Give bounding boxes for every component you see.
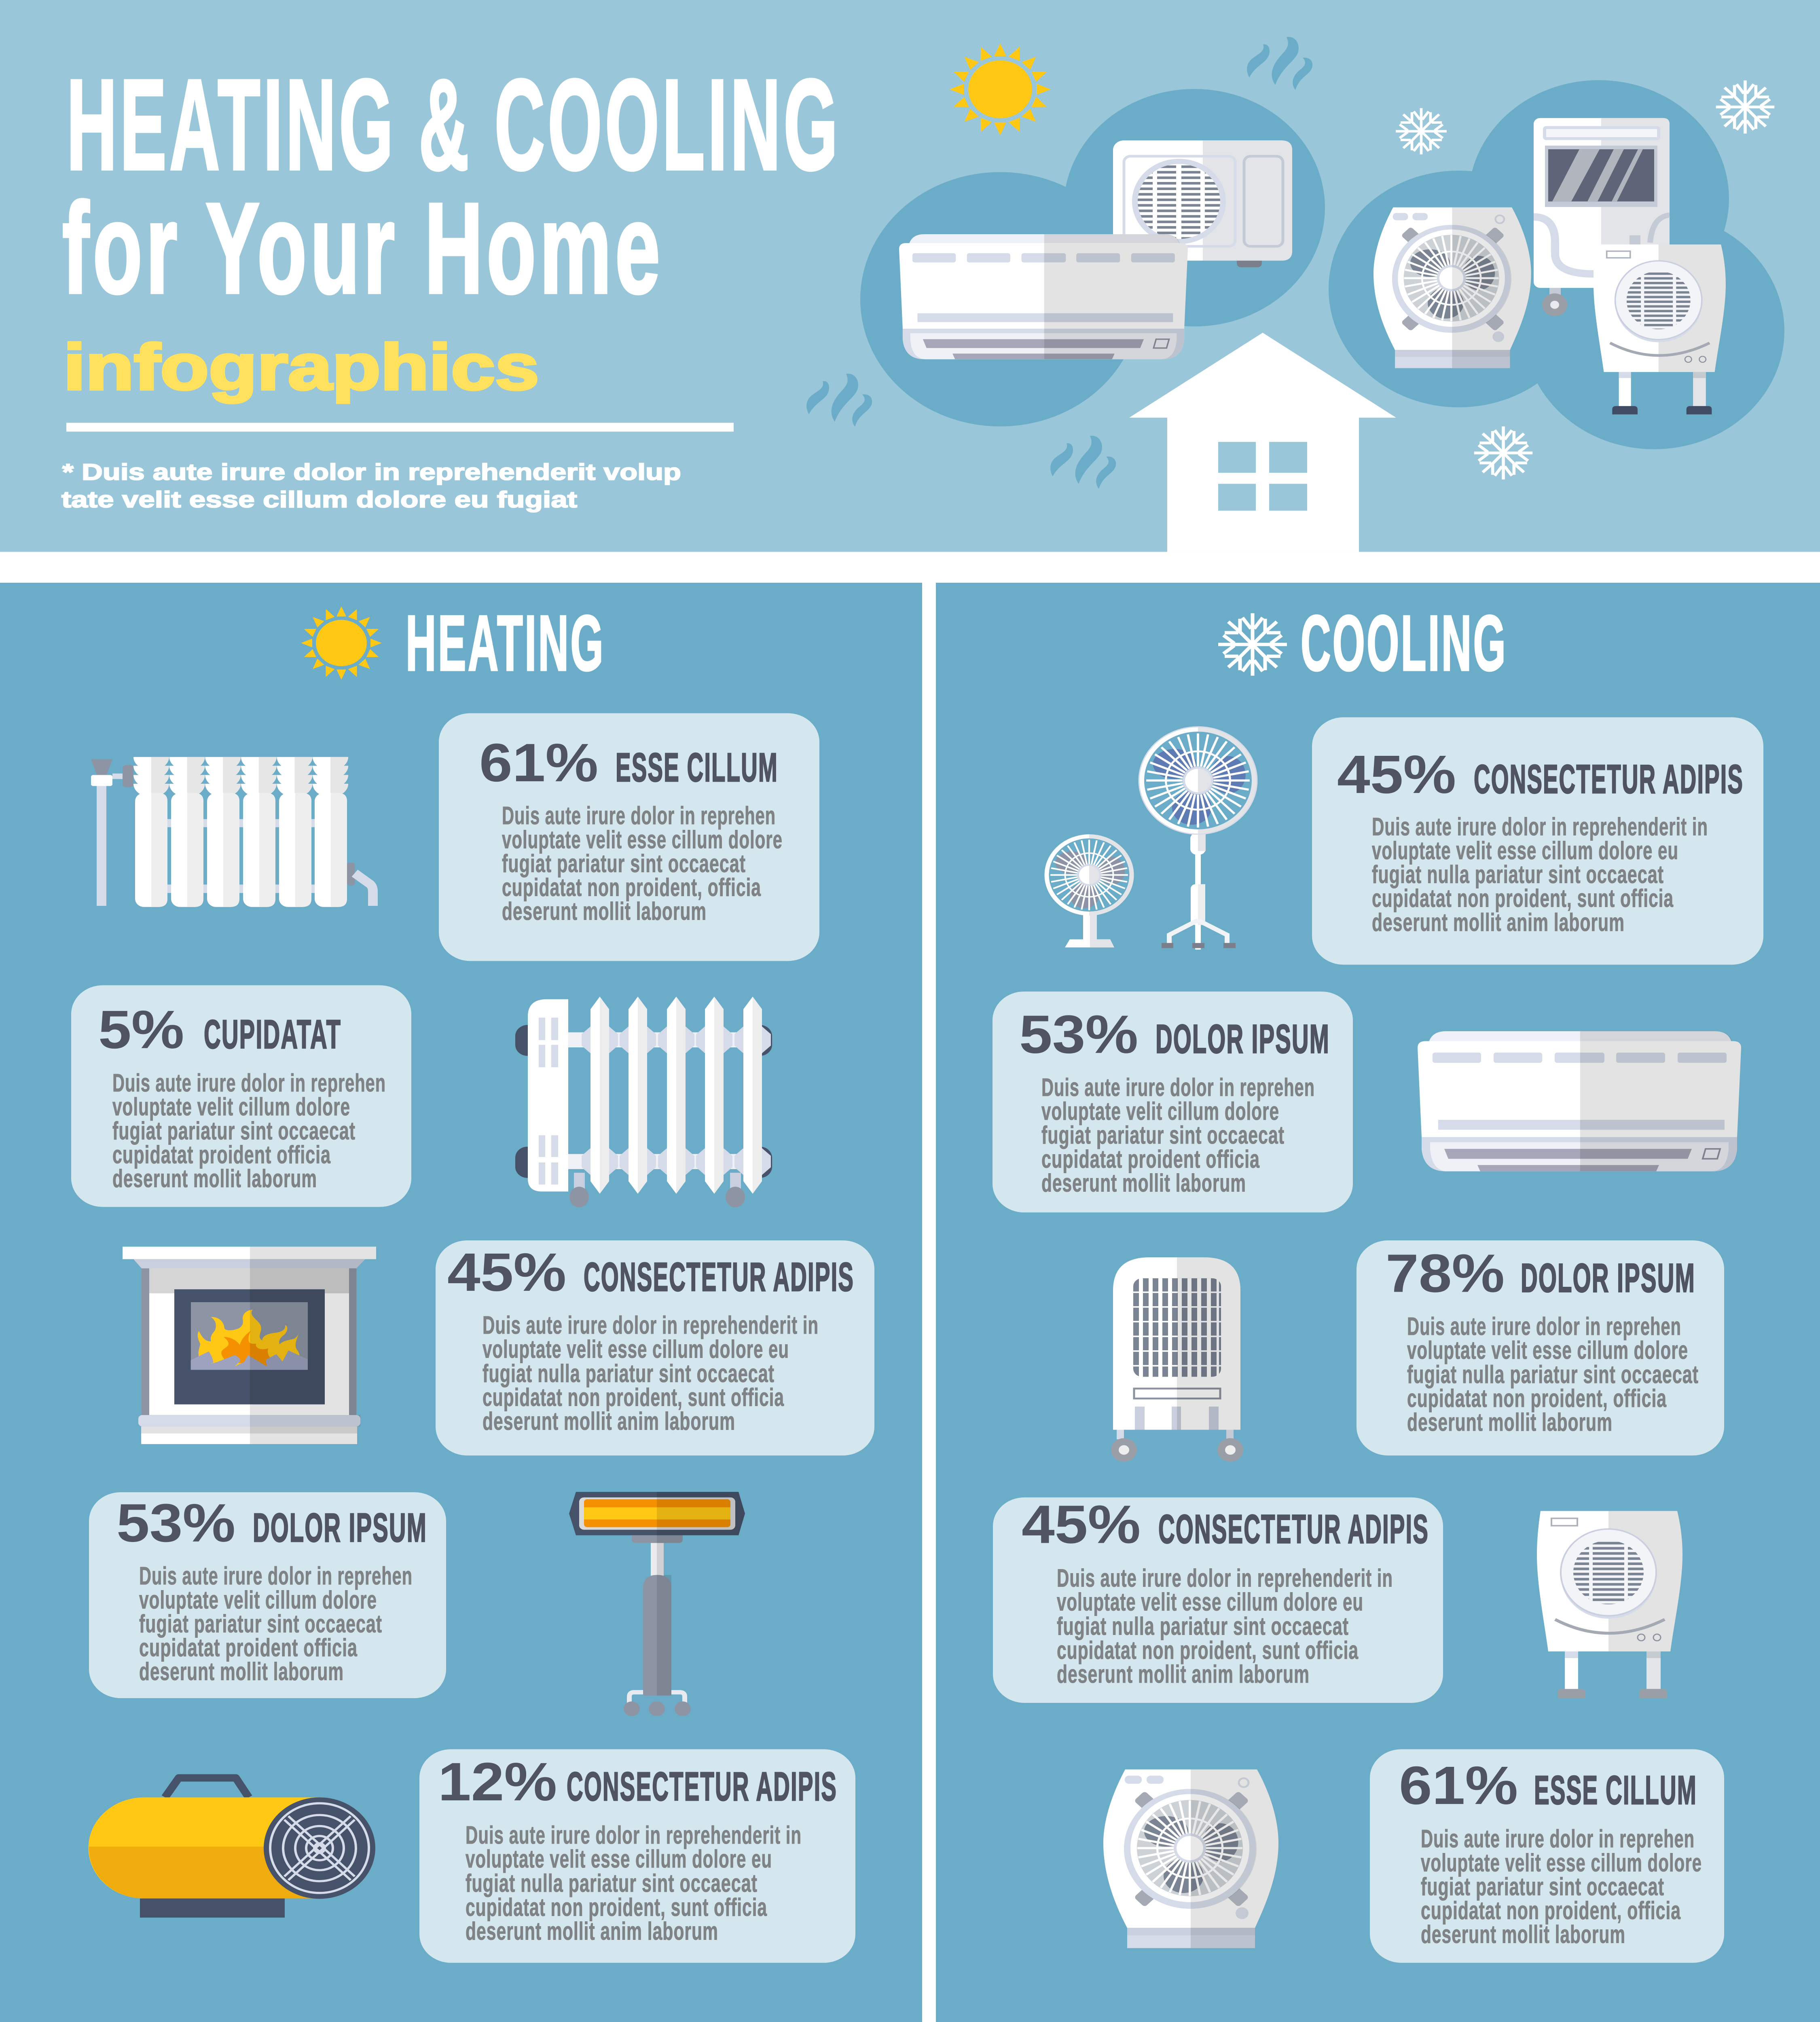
icon: inner flame <box>221 1331 270 1366</box>
card: 45% consectetur adipis heating <box>436 1240 874 1455</box>
icon: box fan lower <box>1103 1769 1278 1948</box>
card: 12% consectetur adipis: voluptate velit esse cillum dolore eu <box>466 1845 772 1873</box>
card: 12% consectetur adipis: deserunt mollit anim laborum <box>466 1917 718 1945</box>
card: 53% dolor ipsum cooling: voluptate velit cillum dolore <box>1041 1097 1279 1125</box>
card: 12% consectetur adipis <box>419 1749 855 1963</box>
icon: oil radiator <box>515 997 772 1207</box>
card: 61% esse cillum cooling: deserunt mollit laborum <box>1421 1920 1625 1948</box>
icon: snowflake 3 <box>1474 426 1532 480</box>
icon: snowflake 2 <box>1716 80 1774 133</box>
card: 78% dolor ipsum: cupidatat non proident, officia <box>1407 1384 1667 1412</box>
card: 5% cupidatat: cupidatat proident officia <box>112 1140 331 1169</box>
icon: air cooler with dark feet <box>1594 245 1726 415</box>
card: 53% dolor ipsum heating <box>89 1492 446 1698</box>
card: 53% dolor ipsum cooling: fugiat pariatur sint occaecat <box>1041 1121 1285 1149</box>
card: 61% esse cillum cooling: fugiat pariatur sint occaecat <box>1421 1872 1664 1901</box>
icon: evaporative cooler on wheels <box>1111 1257 1243 1462</box>
card: 45% consectetur adipis heating: 45% <box>447 1242 566 1302</box>
icon: fireplace <box>123 1247 376 1444</box>
icon: tower cooler with screen <box>1534 118 1670 316</box>
icon: patio heater on stand <box>569 1492 745 1716</box>
card: 53% dolor ipsum cooling <box>993 992 1353 1212</box>
card: 45% consectetur adipis lower: deserunt mollit anim laborum <box>1057 1660 1310 1688</box>
card: 61% esse cillum: voluptate velit esse cillum dolore <box>502 825 783 854</box>
card: 45% consectetur adipis cooling: fugiat nulla pariatur sint occaecat <box>1372 861 1664 888</box>
subtitle: infographics: infographics <box>63 331 539 403</box>
card: 45% consectetur adipis heating: Duis aute irure dolor in reprehenderit in <box>483 1311 819 1339</box>
header note <box>61 459 681 512</box>
card: 53% dolor ipsum heating: 53% <box>116 1493 235 1553</box>
icon: box fan <box>1373 207 1531 368</box>
icon: flames <box>198 1309 299 1366</box>
card: 53% dolor ipsum cooling: DOLOR IPSUM <box>1155 1017 1330 1062</box>
icon: house <box>1129 333 1396 552</box>
desk fan <box>1046 836 1132 948</box>
card: 61% esse cillum cooling <box>1370 1749 1724 1963</box>
icon: logs <box>191 1350 308 1370</box>
card: 53% dolor ipsum heating: deserunt mollit laborum <box>139 1657 344 1686</box>
panel: cooling <box>936 583 1820 2022</box>
icon: steam group 3 <box>1050 436 1116 489</box>
card: 53% dolor ipsum heating: Duis aute irure dolor in reprehen <box>139 1562 413 1590</box>
card: 61% esse cillum: Duis aute irure dolor in reprehen <box>502 802 776 830</box>
card: 78% dolor ipsum: 78% <box>1386 1243 1505 1303</box>
text: COOLING <box>1301 599 1507 687</box>
card: 53% dolor ipsum cooling: Duis aute irure dolor in reprehen <box>1041 1073 1315 1101</box>
icon: air conditioner <box>1418 1031 1741 1171</box>
icon: heating sun <box>298 604 384 682</box>
card: 45% consectetur adipis heating: cupidatat non proident, sunt officia <box>483 1383 784 1411</box>
icon: steam group 1 <box>1247 37 1312 90</box>
card: 53% dolor ipsum cooling: deserunt mollit laborum <box>1041 1169 1246 1197</box>
card: 5% cupidatat: voluptate velit cillum dolore <box>112 1093 350 1121</box>
card: 78% dolor ipsum: deserunt mollit laborum <box>1407 1408 1613 1436</box>
card: 61% esse cillum cooling: 61% <box>1399 1755 1518 1815</box>
icon: snowflake 1 <box>1396 108 1447 154</box>
card: 61% esse cillum: deserunt mollit laborum <box>502 897 707 925</box>
card: 45% consectetur adipis heating: deserunt mollit anim laborum <box>483 1407 735 1435</box>
panel: heating <box>0 583 922 2022</box>
card: 45% consectetur adipis lower: voluptate velit esse cillum dolore eu <box>1057 1588 1363 1616</box>
card: 5% cupidatat: fugiat pariatur sint occaecat <box>112 1117 356 1145</box>
title <box>62 53 841 320</box>
card: 45% consectetur adipis cooling: 45% <box>1337 744 1456 804</box>
icon: indoor air conditioner unit <box>899 234 1188 359</box>
card: 12% consectetur adipis: CONSECTETUR ADIPIS <box>567 1764 837 1809</box>
icon: desk and stand fans <box>1046 727 1257 950</box>
card: 5% cupidatat: 5% <box>98 999 184 1060</box>
card: 61% esse cillum: 61% <box>479 732 598 793</box>
stand fan <box>1139 727 1257 950</box>
card: 12% consectetur adipis: fugiat nulla pariatur sint occaecat <box>466 1869 758 1897</box>
card: 53% dolor ipsum heating: fugiat pariatur sint occaecat <box>139 1610 382 1638</box>
card: 61% esse cillum <box>439 713 819 961</box>
icon: yellow blower heater <box>88 1778 375 1918</box>
card: 45% consectetur adipis cooling <box>1312 717 1763 964</box>
card: 45% consectetur adipis heating: voluptate velit esse cillum dolore eu <box>483 1335 789 1363</box>
card: 12% consectetur adipis: cupidatat non proident, sunt officia <box>466 1893 767 1921</box>
card: 45% consectetur adipis lower: Duis aute irure dolor in reprehenderit in <box>1057 1564 1393 1592</box>
card: 53% dolor ipsum heating: voluptate velit cillum dolore <box>139 1586 377 1614</box>
header rule <box>66 423 734 431</box>
card: 45% consectetur adipis heating: fugiat nulla pariatur sint occaecat <box>483 1359 775 1387</box>
icon: air cooler with grey feet <box>1537 1511 1682 1698</box>
card: 45% consectetur adipis heating: CONSECTETUR ADIPIS <box>584 1254 854 1300</box>
card: 5% cupidatat: deserunt mollit laborum <box>112 1164 317 1193</box>
card: 53% dolor ipsum heating: DOLOR IPSUM <box>253 1505 427 1550</box>
card: 45% consectetur adipis cooling: deserunt mollit anim laborum <box>1372 908 1625 936</box>
card: 53% dolor ipsum heating: cupidatat proident officia <box>139 1633 358 1662</box>
icon: sun <box>947 41 1054 138</box>
card: 53% dolor ipsum cooling: 53% <box>1019 1004 1138 1064</box>
illustration: background blobs <box>860 80 1784 449</box>
card: 5% cupidatat <box>71 985 411 1207</box>
icon: steam group 2 <box>806 374 872 427</box>
card: 12% consectetur adipis: 12% <box>438 1751 557 1812</box>
card: 61% esse cillum: cupidatat non proident, officia <box>502 873 761 901</box>
card: 45% consectetur adipis lower <box>993 1494 1443 1703</box>
card: 45% consectetur adipis lower: CONSECTETUR ADIPIS <box>1158 1507 1429 1552</box>
icon: column radiator <box>91 757 373 907</box>
card: 45% consectetur adipis lower: cupidatat non proident, sunt officia <box>1057 1636 1359 1664</box>
text: HEATING <box>406 599 605 687</box>
icon: cooling snowflake <box>1218 613 1287 676</box>
card: 61% esse cillum: fugiat pariatur sint occaecat <box>502 849 746 878</box>
card: 5% cupidatat: Duis aute irure dolor in reprehen <box>112 1069 386 1097</box>
header note: tate velit esse cillum dolore eu fugiat <box>61 486 577 512</box>
card: 53% dolor ipsum cooling: cupidatat proident officia <box>1041 1145 1260 1173</box>
icon: outdoor air conditioner unit <box>1113 140 1292 267</box>
header note: * Duis aute irure dolor in reprehenderit volup <box>62 459 681 485</box>
card: 12% consectetur adipis: Duis aute irure dolor in reprehenderit in <box>466 1821 802 1849</box>
text: HEATING & COOLING <box>67 53 841 197</box>
card: 5% cupidatat: CUPIDATAT <box>204 1012 341 1057</box>
header background <box>0 0 1820 552</box>
card: 78% dolor ipsum <box>1357 1240 1724 1455</box>
title: for Your Home <box>62 176 664 320</box>
card: 45% consectetur adipis lower: 45% <box>1022 1494 1141 1555</box>
card: 61% esse cillum: ESSE CILLUM <box>616 745 778 790</box>
card: 45% consectetur adipis lower: fugiat nulla pariatur sint occaecat <box>1057 1612 1349 1640</box>
